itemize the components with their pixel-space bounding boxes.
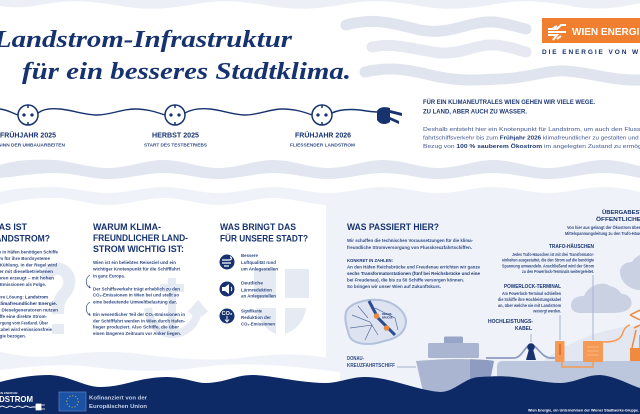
- intro text block: ZU LAND, ABER AUCH ZU WASSER.: [423, 110, 527, 116]
- callout: Trafo-Häuschen: [502, 243, 594, 274]
- footer logo: Landstrom: [0, 391, 45, 410]
- logo: Wien Energie: [542, 18, 640, 56]
- benefit text: CO2: [241, 308, 275, 326]
- bottom light wave: [0, 352, 340, 382]
- callout: Powerlock-Terminal: versorgt werden.: [533, 308, 561, 314]
- cloud left: [571, 284, 632, 313]
- arrow 2: [86, 302, 90, 316]
- text block: Ein wesentlicher Teil der CO₂-Emissionen in: [93, 312, 185, 317]
- icon: socket 2026 spring: [312, 105, 332, 125]
- benefit text: noise: [241, 281, 276, 299]
- title: für ein besseres Stadtklima.: [22, 59, 351, 85]
- callout: Trafo-Häuschen: TRAFO-HÄUSCHEN: [549, 243, 594, 250]
- heading: FÜR UNSERE STADT?: [220, 234, 308, 244]
- panel: right light section: [326, 205, 640, 400]
- callout: Trafo-Häuschen: Spannung umwandeln. Anschließend wird der Strom: [502, 263, 594, 268]
- milestone labels: FRÜHJAHR 2025: [0, 130, 56, 140]
- callout: Trafo-Häuschen: Jedes Trafo-Häuschen ist mit drei Transformator-: [512, 252, 594, 257]
- text block: eine bedeutende Umweltbelastung dar.: [93, 299, 177, 304]
- panel: Was ist Landstrom: [0, 222, 58, 338]
- callout lines: [531, 275, 593, 342]
- watermark: Vienna shield: [254, 269, 309, 334]
- benefit text: noise: Deutliche: [241, 281, 263, 286]
- icon: CO2 reduction: CO₂: [222, 311, 233, 317]
- intro text block: Bezug von 100 % sauberem Ökostrom im angelegten Zustand zu ermöglichen.: [423, 143, 640, 150]
- arrow 1: [86, 275, 90, 288]
- quay: [497, 361, 640, 401]
- intro text block: Deshalb entsteht hier ein Knotenpunkt für Landstrom, um auch den Flusskreuz-: [423, 127, 640, 133]
- footer band: [0, 375, 640, 414]
- title: Landstrom-Infrastruktur: [0, 27, 293, 53]
- text block: [92, 260, 185, 336]
- icon: socket 2025 autumn: [165, 105, 185, 125]
- callout: Powerlock-Terminal: POWERLOCK-TERMINAL: [504, 284, 561, 290]
- icon: air quality: [220, 254, 234, 270]
- icon: plug: [377, 107, 402, 124]
- benefit text: noise: an Anlegestellen: [241, 294, 276, 299]
- cloud right: [620, 255, 640, 290]
- ship: [416, 336, 494, 396]
- benefit text: air: um Anlegestellen: [241, 266, 278, 272]
- benefit text: CO2: CO₂-Emissionen: [241, 321, 275, 326]
- text block: [347, 238, 480, 289]
- hill: [543, 325, 640, 361]
- watermark: question mark: [46, 269, 69, 334]
- panel: Was passiert hier: [345, 222, 480, 369]
- benefit text: air: Bessere: [241, 253, 258, 258]
- heading: STROM WICHTIG IST:: [93, 244, 184, 254]
- milestone labels: FRÜHJAHR 2026: [295, 130, 351, 140]
- panel: Warum klimafreundlicher Landstrom wichtig ist: [86, 222, 188, 336]
- benefit text: noise: Lärmreduktion: [241, 287, 272, 292]
- callout: Hochleistungskabel: HOCHLEISTUNGS-: [488, 319, 533, 325]
- text block: Wien ist ein beliebtes Reiseziel und ein: [93, 260, 176, 265]
- text block: [0, 250, 58, 338]
- EU flag: [59, 392, 86, 411]
- top decorative waves: [0, 0, 640, 80]
- callout: Powerlock-Terminal: [498, 284, 561, 314]
- powerlock terminal: [555, 341, 564, 362]
- label: Donau-Kreuzfahrtschiff: KREUZFAHRTSCHIFF: [347, 363, 395, 369]
- heading: WARUM KLIMA-: [93, 222, 161, 232]
- callout: Powerlock-Terminal: die Schiffe ihre Hochleistungskabel: [498, 297, 561, 302]
- text block: Wir schaffen die technischen Voraussetzungen für die klima-: [347, 238, 473, 243]
- text block: Der Schiffsverkehr trägt erheblich zu den: [93, 286, 180, 291]
- text block: KONKRET IN ZAHLEN:: [347, 258, 393, 263]
- callout: Übergabestelle: [565, 209, 640, 236]
- heading: [220, 222, 308, 244]
- callout: Hochleistungskabel: [488, 319, 533, 332]
- label: Donau-Kreuzfahrtschiff: DONAU-: [347, 356, 364, 362]
- pylon: [630, 310, 640, 361]
- benefit text: CO2: Reduktion der: [241, 315, 271, 320]
- panel: Was bringt das für unsere Stadt: [220, 222, 308, 326]
- milestone labels: [0, 130, 355, 148]
- text block: freundliche Stromversorgung von Flusskreuzfahrtschiffen.: [347, 245, 472, 250]
- timeline: plug cable with milestones: [0, 105, 402, 125]
- callout: Powerlock-Terminal: Am Powerlock-Terminal schließen: [502, 291, 561, 296]
- callout: Trafo-Häuschen: zu den Powerlock-Terminals weitergeleitet.: [522, 269, 594, 274]
- heading: WAS PASSIERT HIER?: [347, 222, 439, 232]
- text block: einen längeren Zeitraum vor Anker liegen.: [93, 331, 181, 336]
- EU funding text: [89, 396, 148, 410]
- milestone labels: HERBST 2025: [152, 132, 199, 140]
- text block: in ganz Europa.: [93, 274, 125, 278]
- heading: FREUNDLICHER LAND-: [93, 233, 188, 243]
- EU funding text: Kofinanziert von der: [89, 396, 148, 402]
- high-power cable and connector: [486, 343, 558, 360]
- heading: WAS BRINGT DAS: [220, 222, 296, 232]
- icon: socket 2025 spring: [18, 105, 38, 125]
- intro text block: fahrtschiffsverkehr bis zum Frühjahr 2026 klimafreundlicher zu gestalten und den: [423, 136, 640, 142]
- callout: Trafo-Häuschen: einheiten ausgestattet, die den Strom auf die benötigte: [502, 257, 594, 262]
- callout: Hochleistungskabel: KABEL: [515, 326, 533, 332]
- map of Vienna: BRÜCKE: [382, 316, 393, 320]
- text block: So bringen wir unser Wien auf Zukunftskurs.: [347, 284, 441, 289]
- text block: sechs Transformatorstationen (fünf bei Reichsbrücke und eine: [347, 271, 480, 276]
- bottom white wave: [0, 364, 340, 390]
- orange cables: [562, 325, 630, 367]
- benefit text: air: Luftqualität rund: [241, 260, 276, 265]
- milestone labels: START DES TESTBETRIEBS: [144, 142, 207, 148]
- benefit text: air: [241, 253, 278, 272]
- text block: der Schifffahrt werden in Wien durch Hafen-: [93, 318, 185, 323]
- text block: wichtiger Knotenpunkt für die Schifffahrt: [92, 266, 180, 272]
- heading: [0, 222, 50, 244]
- transformer hut: [583, 341, 603, 362]
- intro text block: [423, 99, 640, 150]
- title: [0, 27, 351, 85]
- benefit text: CO2: Signifikante: [241, 308, 262, 313]
- map of Vienna: [345, 300, 406, 344]
- text block: lieger produziert. Also Schiffe, die über: [93, 325, 179, 330]
- panel: left white section: [0, 205, 326, 360]
- map of Vienna: REICHS-: [382, 313, 392, 316]
- EU funding text: Europäischen Union: [89, 404, 148, 410]
- icon: noise reduction: [220, 282, 234, 296]
- text block: bei Freudenau), die bis zu 50 Schiffe versorgen können.: [347, 278, 464, 283]
- text block: CO₂-Emissionen in Wien bei und stellt so: [93, 293, 179, 298]
- label: Donau-Kreuzfahrtschiff: [347, 356, 416, 369]
- heading: [93, 222, 188, 254]
- mid waves: [0, 160, 640, 210]
- callout: Powerlock-Terminal: an, über welche sie mit Landstrom: [498, 303, 561, 308]
- text block: An den Häfen Reichsbrücke und Freudenau errichten wir ganze: [347, 265, 480, 270]
- intro text block: FÜR EIN KLIMANEUTRALES WIEN GEHEN WIR VIELE WEGE.: [423, 99, 595, 106]
- milestone labels: FLIESSENDER LANDSTROM: [290, 142, 355, 148]
- watermark: anchor: [148, 278, 205, 334]
